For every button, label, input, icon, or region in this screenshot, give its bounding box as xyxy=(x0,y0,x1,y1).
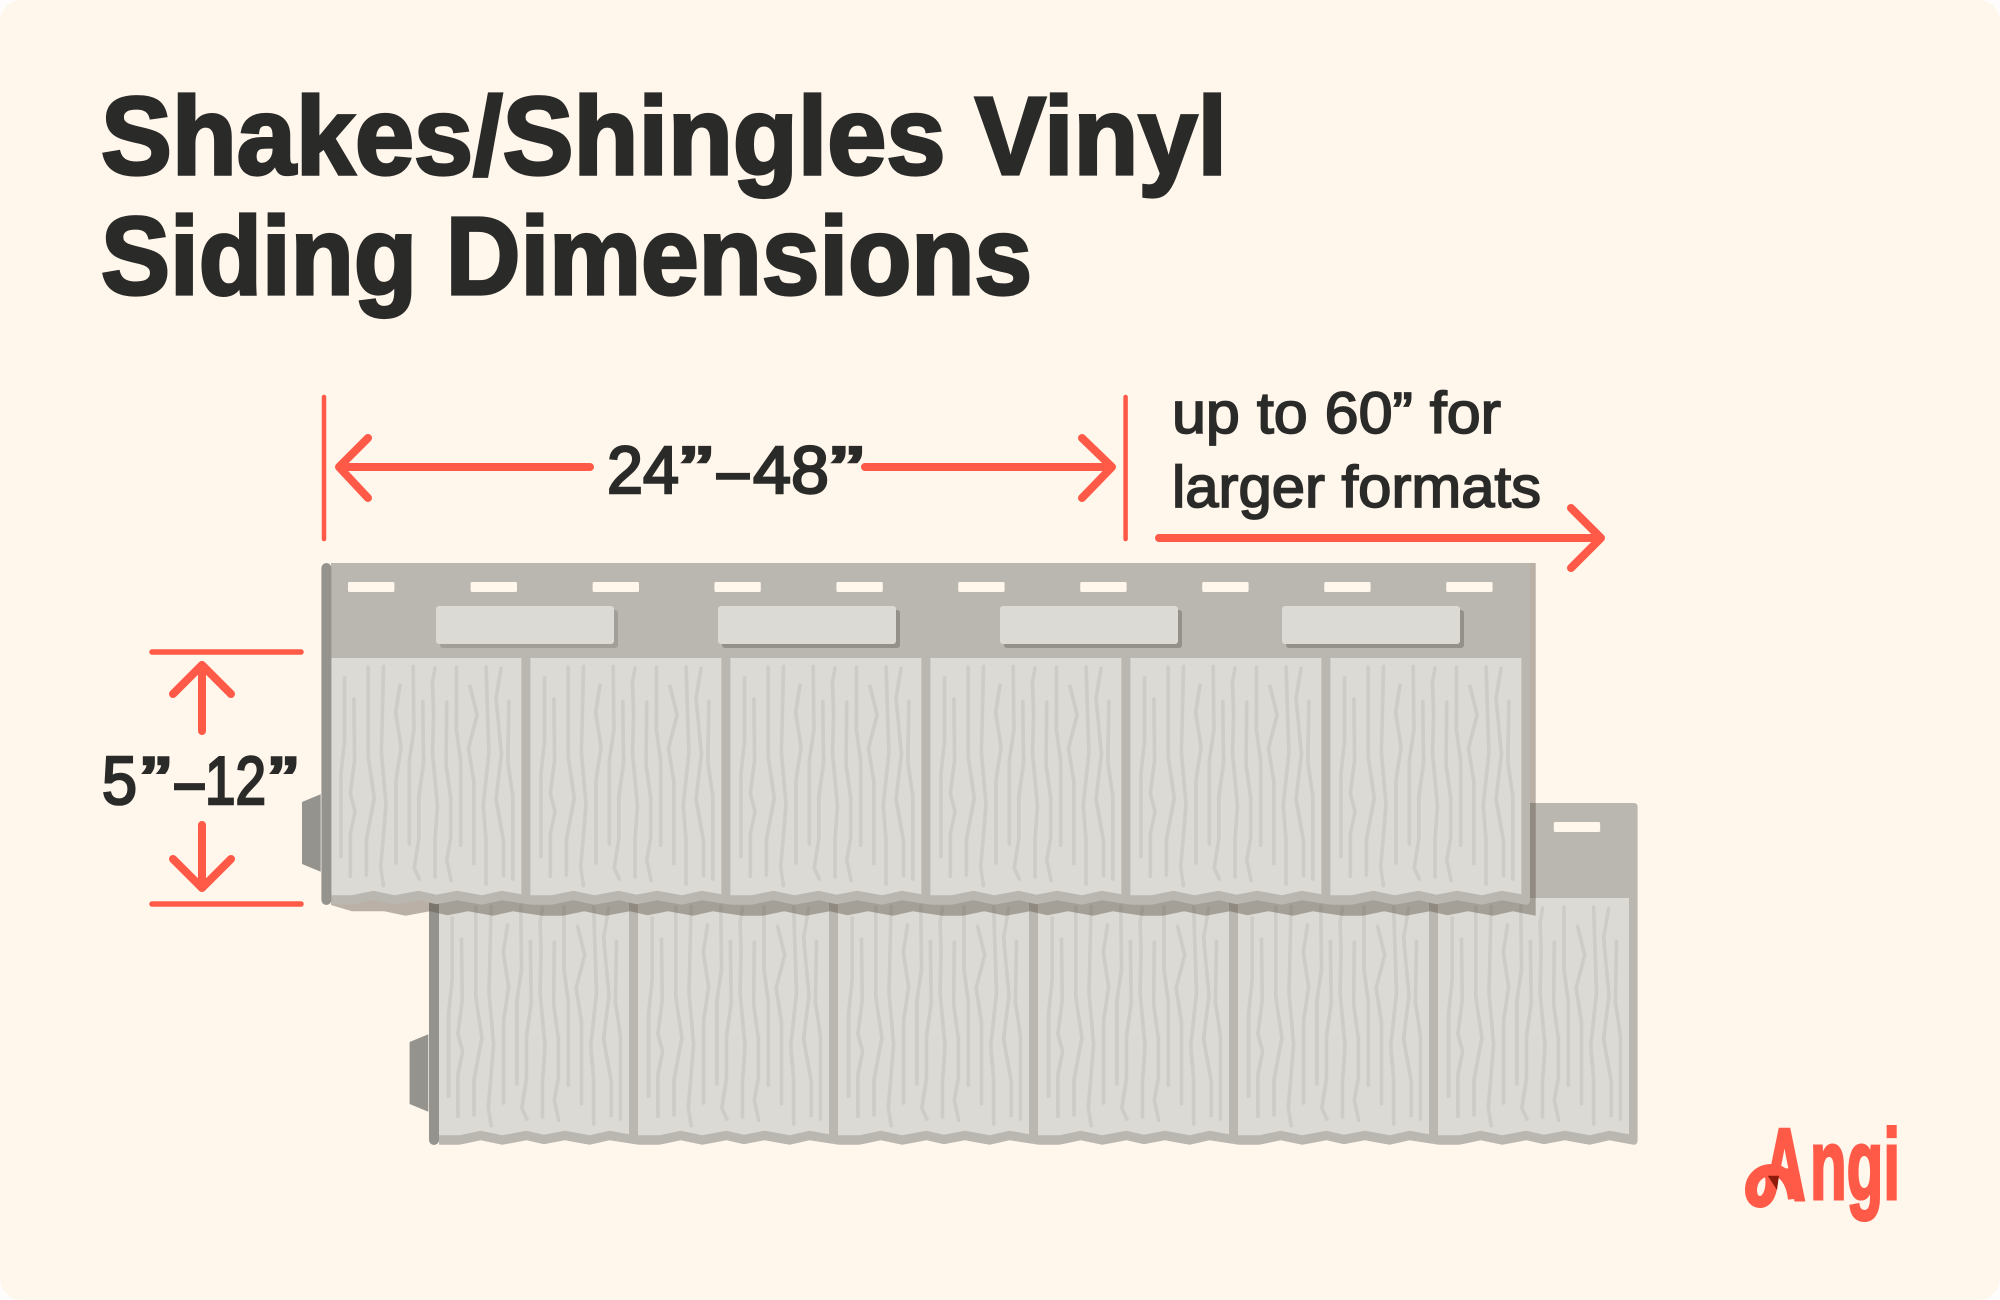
Angi logo: ngi xyxy=(1810,1109,1900,1221)
upper siding panel xyxy=(302,563,1530,905)
height dimension: 5 to 12 inches xyxy=(102,652,301,904)
upper panel raised tabs xyxy=(436,606,1464,648)
arrow: down xyxy=(173,825,231,888)
arrow: right xyxy=(865,438,1112,498)
title: Siding Dimensions xyxy=(101,195,1032,318)
lower siding panel xyxy=(410,803,1638,1145)
title xyxy=(101,75,1227,318)
arrow: extended length xyxy=(1159,508,1601,568)
label: 24 to 48 inches: ” xyxy=(680,433,713,508)
Angi logo: A xyxy=(1764,1109,1805,1221)
label: 24 to 48 inches: – xyxy=(717,433,750,508)
width dimension: 24 to 48 inches xyxy=(324,397,1126,539)
title: Shakes/Shingles Vinyl xyxy=(101,75,1227,198)
label: 24 to 48 inches: 48 xyxy=(753,433,829,508)
arrow: left xyxy=(339,438,590,498)
label: 5 to 12 inches: ” xyxy=(141,743,171,819)
label: 5 to 12 inches: ” xyxy=(269,743,298,819)
note: up to 60 inches for larger formats: larger formats xyxy=(1172,455,1541,520)
label: 5 to 12 inches: – xyxy=(175,743,204,819)
label: 24 to 48 inches: ” xyxy=(830,433,864,508)
cast shadow of upper panel xyxy=(331,563,1536,916)
label: 24 to 48 inches: 24 xyxy=(607,433,679,508)
label: 5 to 12 inches: 12 xyxy=(205,743,266,819)
label: 5 to 12 inches: 5 xyxy=(102,743,137,819)
arrow: up xyxy=(173,665,231,731)
Angi logo xyxy=(1740,1109,1900,1221)
note: up to 60 inches for larger formats: up to 60” for xyxy=(1172,381,1501,446)
note: up to 60 inches for larger formats xyxy=(1172,381,1541,520)
